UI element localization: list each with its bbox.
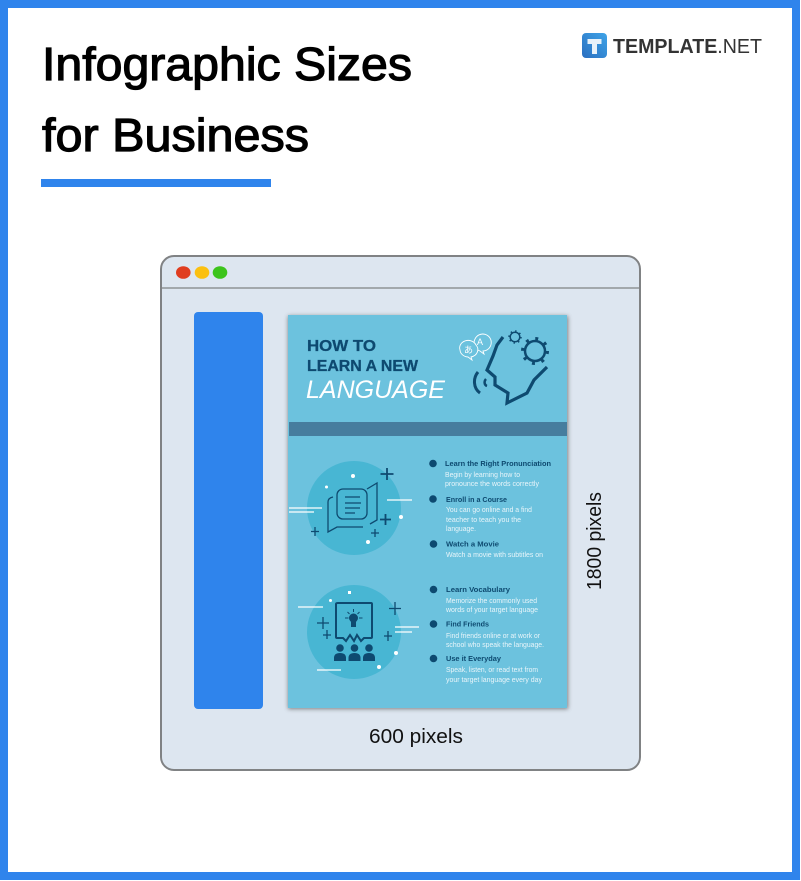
sidebar bbox=[194, 312, 263, 709]
item: everyday bbox=[430, 654, 542, 684]
icon: speech bubbles: あ bbox=[464, 345, 473, 355]
illustration: presentation bbox=[298, 585, 419, 679]
icon: idea board bbox=[336, 603, 372, 641]
width label: 600 pixels bbox=[369, 726, 463, 748]
icon: small gear bbox=[509, 331, 521, 343]
icon: chat bbox=[328, 483, 377, 532]
item: movie: Watch a movie with subtitles on bbox=[446, 550, 543, 559]
white lines bbox=[298, 607, 419, 670]
icon: speech bubbles bbox=[460, 334, 491, 360]
icon: large gear bbox=[522, 338, 548, 364]
item: everyday: Speak, listen, or read text from bbox=[446, 665, 538, 674]
item: course: teacher to teach you the bbox=[446, 515, 521, 524]
item: everyday: your target language every day bbox=[446, 675, 542, 684]
item: vocabulary: Learn Vocabulary bbox=[446, 585, 511, 594]
item: course: Enroll in a Course bbox=[446, 495, 507, 504]
item: course: language. bbox=[446, 524, 476, 533]
item: course: You can go online and a find bbox=[446, 505, 532, 514]
icon: audience bbox=[334, 644, 375, 661]
item: pronunciation: Begin by learning how to bbox=[445, 470, 520, 479]
item: course bbox=[429, 495, 532, 533]
title bbox=[42, 38, 412, 161]
divider band bbox=[289, 422, 567, 436]
plus signs bbox=[311, 468, 394, 537]
illustration: chat bubbles bbox=[289, 461, 412, 555]
list: top group bbox=[429, 459, 551, 559]
item: friends: Find friends online or at work or bbox=[446, 631, 541, 640]
white lines bbox=[289, 500, 412, 512]
dots bbox=[325, 474, 403, 544]
title: Infographic Sizes bbox=[42, 38, 412, 90]
item: pronunciation bbox=[429, 459, 551, 488]
item: vocabulary: Memorize the commonly used bbox=[446, 596, 537, 605]
plus signs bbox=[317, 602, 401, 641]
browser window bbox=[161, 256, 640, 770]
item: vocabulary bbox=[430, 585, 538, 614]
title underline bbox=[41, 179, 271, 187]
item: vocabulary: words of your target language bbox=[445, 605, 538, 614]
item: movie: Watch a Movie bbox=[446, 540, 499, 548]
dots bbox=[329, 591, 398, 669]
window buttons bbox=[176, 266, 227, 279]
poster title bbox=[306, 338, 445, 404]
poster title: HOW TO bbox=[307, 338, 376, 355]
title: for Business bbox=[42, 109, 309, 161]
logo wordmark: TEMPLATE.NET bbox=[613, 36, 762, 58]
poster title: LEARN A NEW bbox=[307, 358, 418, 375]
list: bottom group bbox=[430, 585, 544, 684]
item: movie bbox=[430, 540, 543, 559]
item: friends: Find Friends bbox=[446, 620, 489, 628]
height label: 1800 pixels bbox=[584, 492, 606, 590]
item: pronunciation: Learn the Right Pronunciation bbox=[445, 459, 551, 468]
icon: head with gears bbox=[460, 331, 548, 403]
logo: Template.net bbox=[582, 33, 762, 58]
poster title: LANGUAGE bbox=[306, 376, 445, 404]
poster bbox=[288, 315, 568, 709]
icon: logo T bbox=[582, 33, 607, 58]
item: friends bbox=[430, 620, 544, 649]
icon: speech bubbles: A bbox=[477, 337, 483, 347]
item: everyday: Use it Everyday bbox=[446, 654, 502, 663]
item: friends: school who speak the language. bbox=[446, 640, 544, 649]
item: pronunciation: pronounce the words correctly bbox=[445, 479, 539, 488]
